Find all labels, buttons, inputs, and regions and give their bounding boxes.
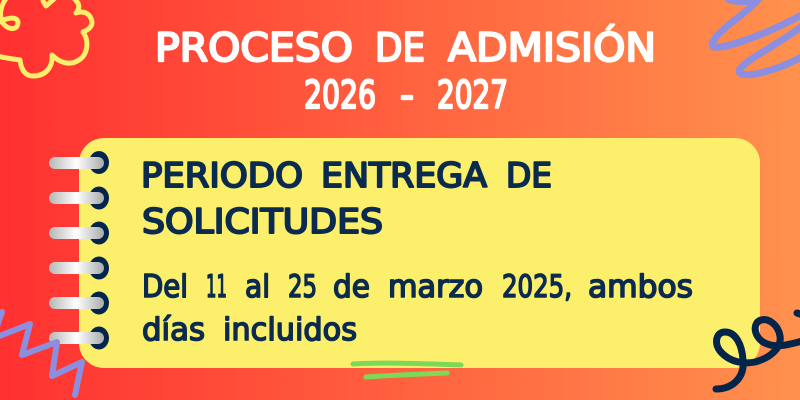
notebook card (79, 138, 760, 368)
ring 6 (49, 326, 109, 350)
date line 1: Del (142, 269, 188, 305)
date line 1: 11 (206, 269, 227, 305)
heading line 1: DE (506, 156, 552, 196)
title line 2: - (400, 73, 414, 117)
ring 5 (49, 292, 109, 314)
title line 2: 2027 (437, 73, 508, 117)
ring 3 (49, 222, 109, 244)
doodle: navy curl end (797, 313, 800, 316)
green underline (353, 363, 461, 377)
heading line 1: PERIODO (141, 156, 303, 196)
ring 4 (49, 256, 109, 280)
doodle: purple zigzag bottom left (0, 312, 82, 395)
title (155, 24, 656, 117)
date line 2: días (142, 312, 205, 348)
doodle: yellow cloud (0, 0, 92, 76)
heading line 1: ENTREGA (321, 156, 487, 196)
date line 1: 2025, (502, 269, 572, 305)
title line 1: PROCESO (155, 26, 353, 71)
title line 2: 2026 (304, 73, 376, 117)
heading line 2: SOLICITUDES (142, 202, 383, 242)
card text (141, 156, 693, 348)
title line 1: DE (375, 26, 425, 71)
doodle: purple scribble top right (712, 0, 800, 75)
date line 1: de (333, 269, 370, 305)
date line 1: ambos (588, 269, 693, 305)
spiral binding (49, 151, 109, 350)
ring 2 (49, 186, 109, 210)
date line 1: marzo (388, 269, 483, 305)
doodle: navy curl bottom right (716, 320, 800, 389)
title line 1: ADMISIÓN (448, 24, 656, 71)
date line 2: incluidos (223, 312, 357, 348)
ring 1 (49, 151, 109, 174)
date line 1: al (245, 269, 270, 305)
date line 1: 25 (288, 269, 317, 305)
